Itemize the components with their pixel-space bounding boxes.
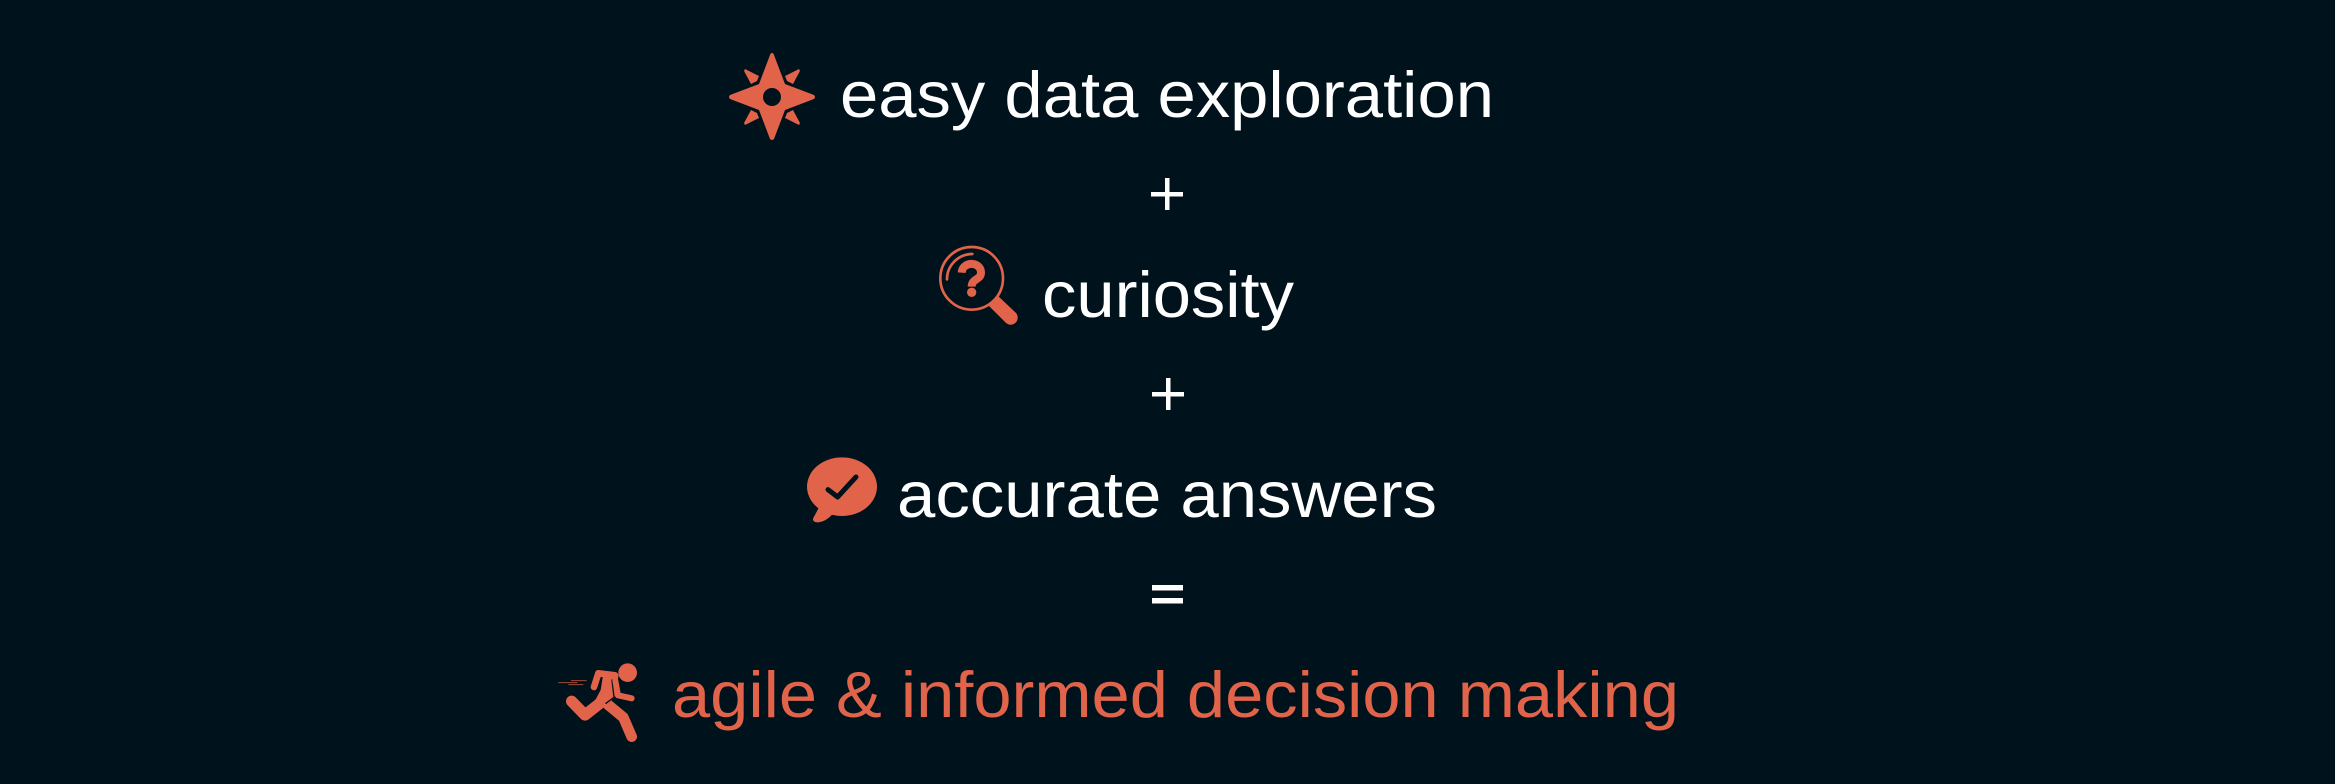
icon: speech bubble with check mark — [807, 457, 877, 522]
text: agile & informed decision making: agile & informed decision making — [672, 658, 1679, 731]
icon: running person — [558, 663, 637, 737]
icon: compass star — [729, 53, 815, 140]
plus sign 2 — [1152, 378, 1184, 410]
plus sign 1 — [1151, 178, 1183, 210]
text: easy data exploration: easy data exploration — [840, 58, 1494, 131]
equals sign — [1152, 585, 1183, 604]
text: accurate answers: accurate answers — [897, 458, 1437, 531]
icon: magnifier with question mark — [940, 247, 1018, 325]
text: curiosity: curiosity — [1042, 258, 1295, 331]
